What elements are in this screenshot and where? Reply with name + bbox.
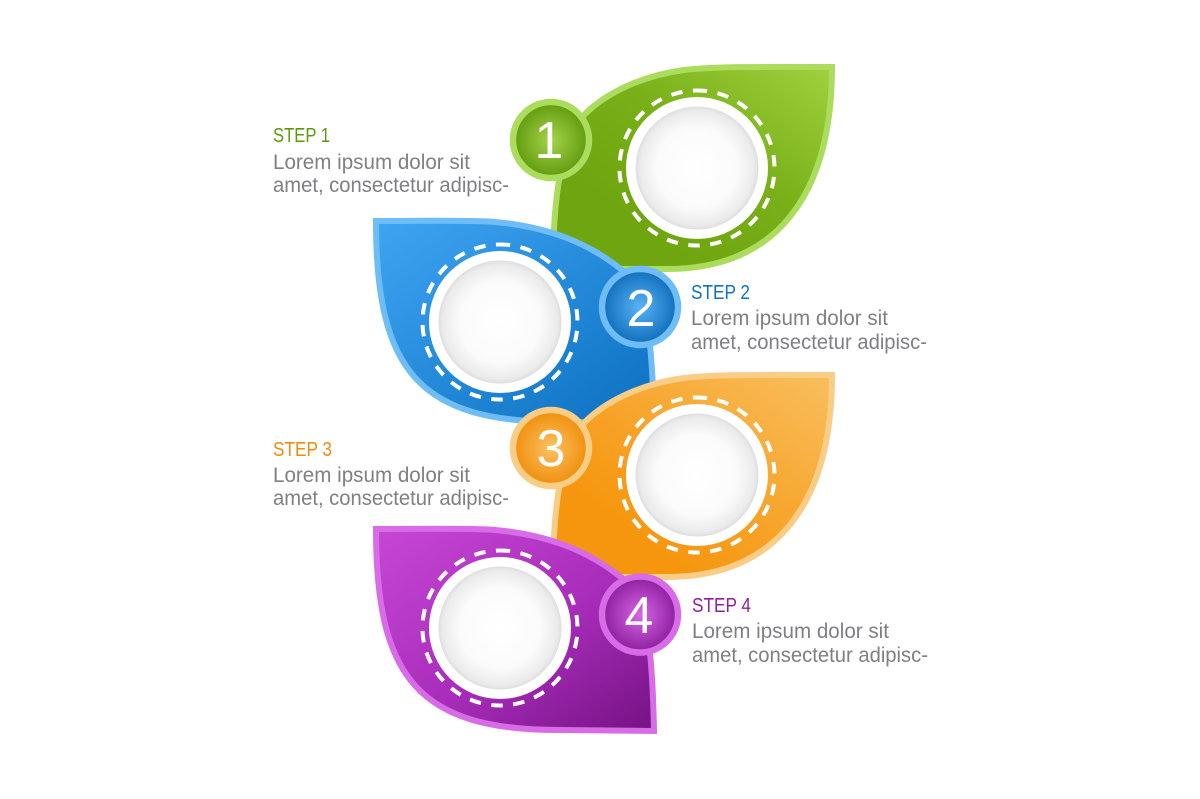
text block: step 4: STEP 4: [692, 595, 751, 617]
dashed ring: orange: [618, 396, 776, 554]
number badge 1: [513, 102, 589, 178]
step 1: green leaf with badge: [513, 67, 832, 269]
text block: step 3: Lorem ipsum dolor sit: [273, 464, 470, 487]
leaf shape: orange: [553, 375, 832, 577]
number badge 3: 3: [537, 420, 565, 478]
text block: step 1: [273, 125, 509, 197]
image placeholder: blue: [429, 251, 571, 393]
number badge 4: [602, 576, 678, 652]
dashed ring: blue: [421, 243, 579, 401]
text block: step 2: amet, consectetur adipisc-: [691, 331, 927, 354]
step 2: blue leaf with badge: [376, 221, 678, 423]
text block: step 4: [692, 595, 928, 667]
text block: step 1: Lorem ipsum dolor sit: [273, 151, 470, 174]
text block: step 3: STEP 3: [273, 439, 332, 461]
dashed ring: purple: [421, 549, 579, 707]
number badge 1: 1: [535, 112, 563, 170]
step 4: purple leaf with badge: [376, 529, 678, 731]
leaf shape: blue: [376, 221, 654, 423]
text block: step 2: Lorem ipsum dolor sit: [691, 307, 888, 330]
leaf shape: purple: [376, 529, 654, 731]
text block: step 3: [273, 439, 509, 510]
number badge 2: 2: [627, 280, 655, 338]
image placeholder: purple: [429, 557, 571, 699]
number badge 2: [602, 269, 678, 345]
text block: step 1: STEP 1: [273, 125, 330, 147]
text block: step 3: amet, consectetur adipisc-: [273, 487, 509, 510]
text block: step 2: [691, 282, 927, 354]
number badge 3: [513, 410, 589, 486]
number badge 4: 4: [625, 587, 653, 645]
step 3: orange leaf with badge: [513, 375, 832, 577]
image placeholder: green: [626, 97, 768, 239]
text block: step 1: amet, consectetur adipisc-: [273, 174, 509, 197]
text block: step 4: amet, consectetur adipisc-: [692, 644, 928, 667]
leaf shape: green: [553, 67, 832, 269]
image placeholder: orange: [626, 404, 768, 546]
dashed ring: green: [618, 89, 776, 247]
text block: step 4: Lorem ipsum dolor sit: [692, 620, 889, 643]
text block: step 2: STEP 2: [691, 282, 750, 304]
